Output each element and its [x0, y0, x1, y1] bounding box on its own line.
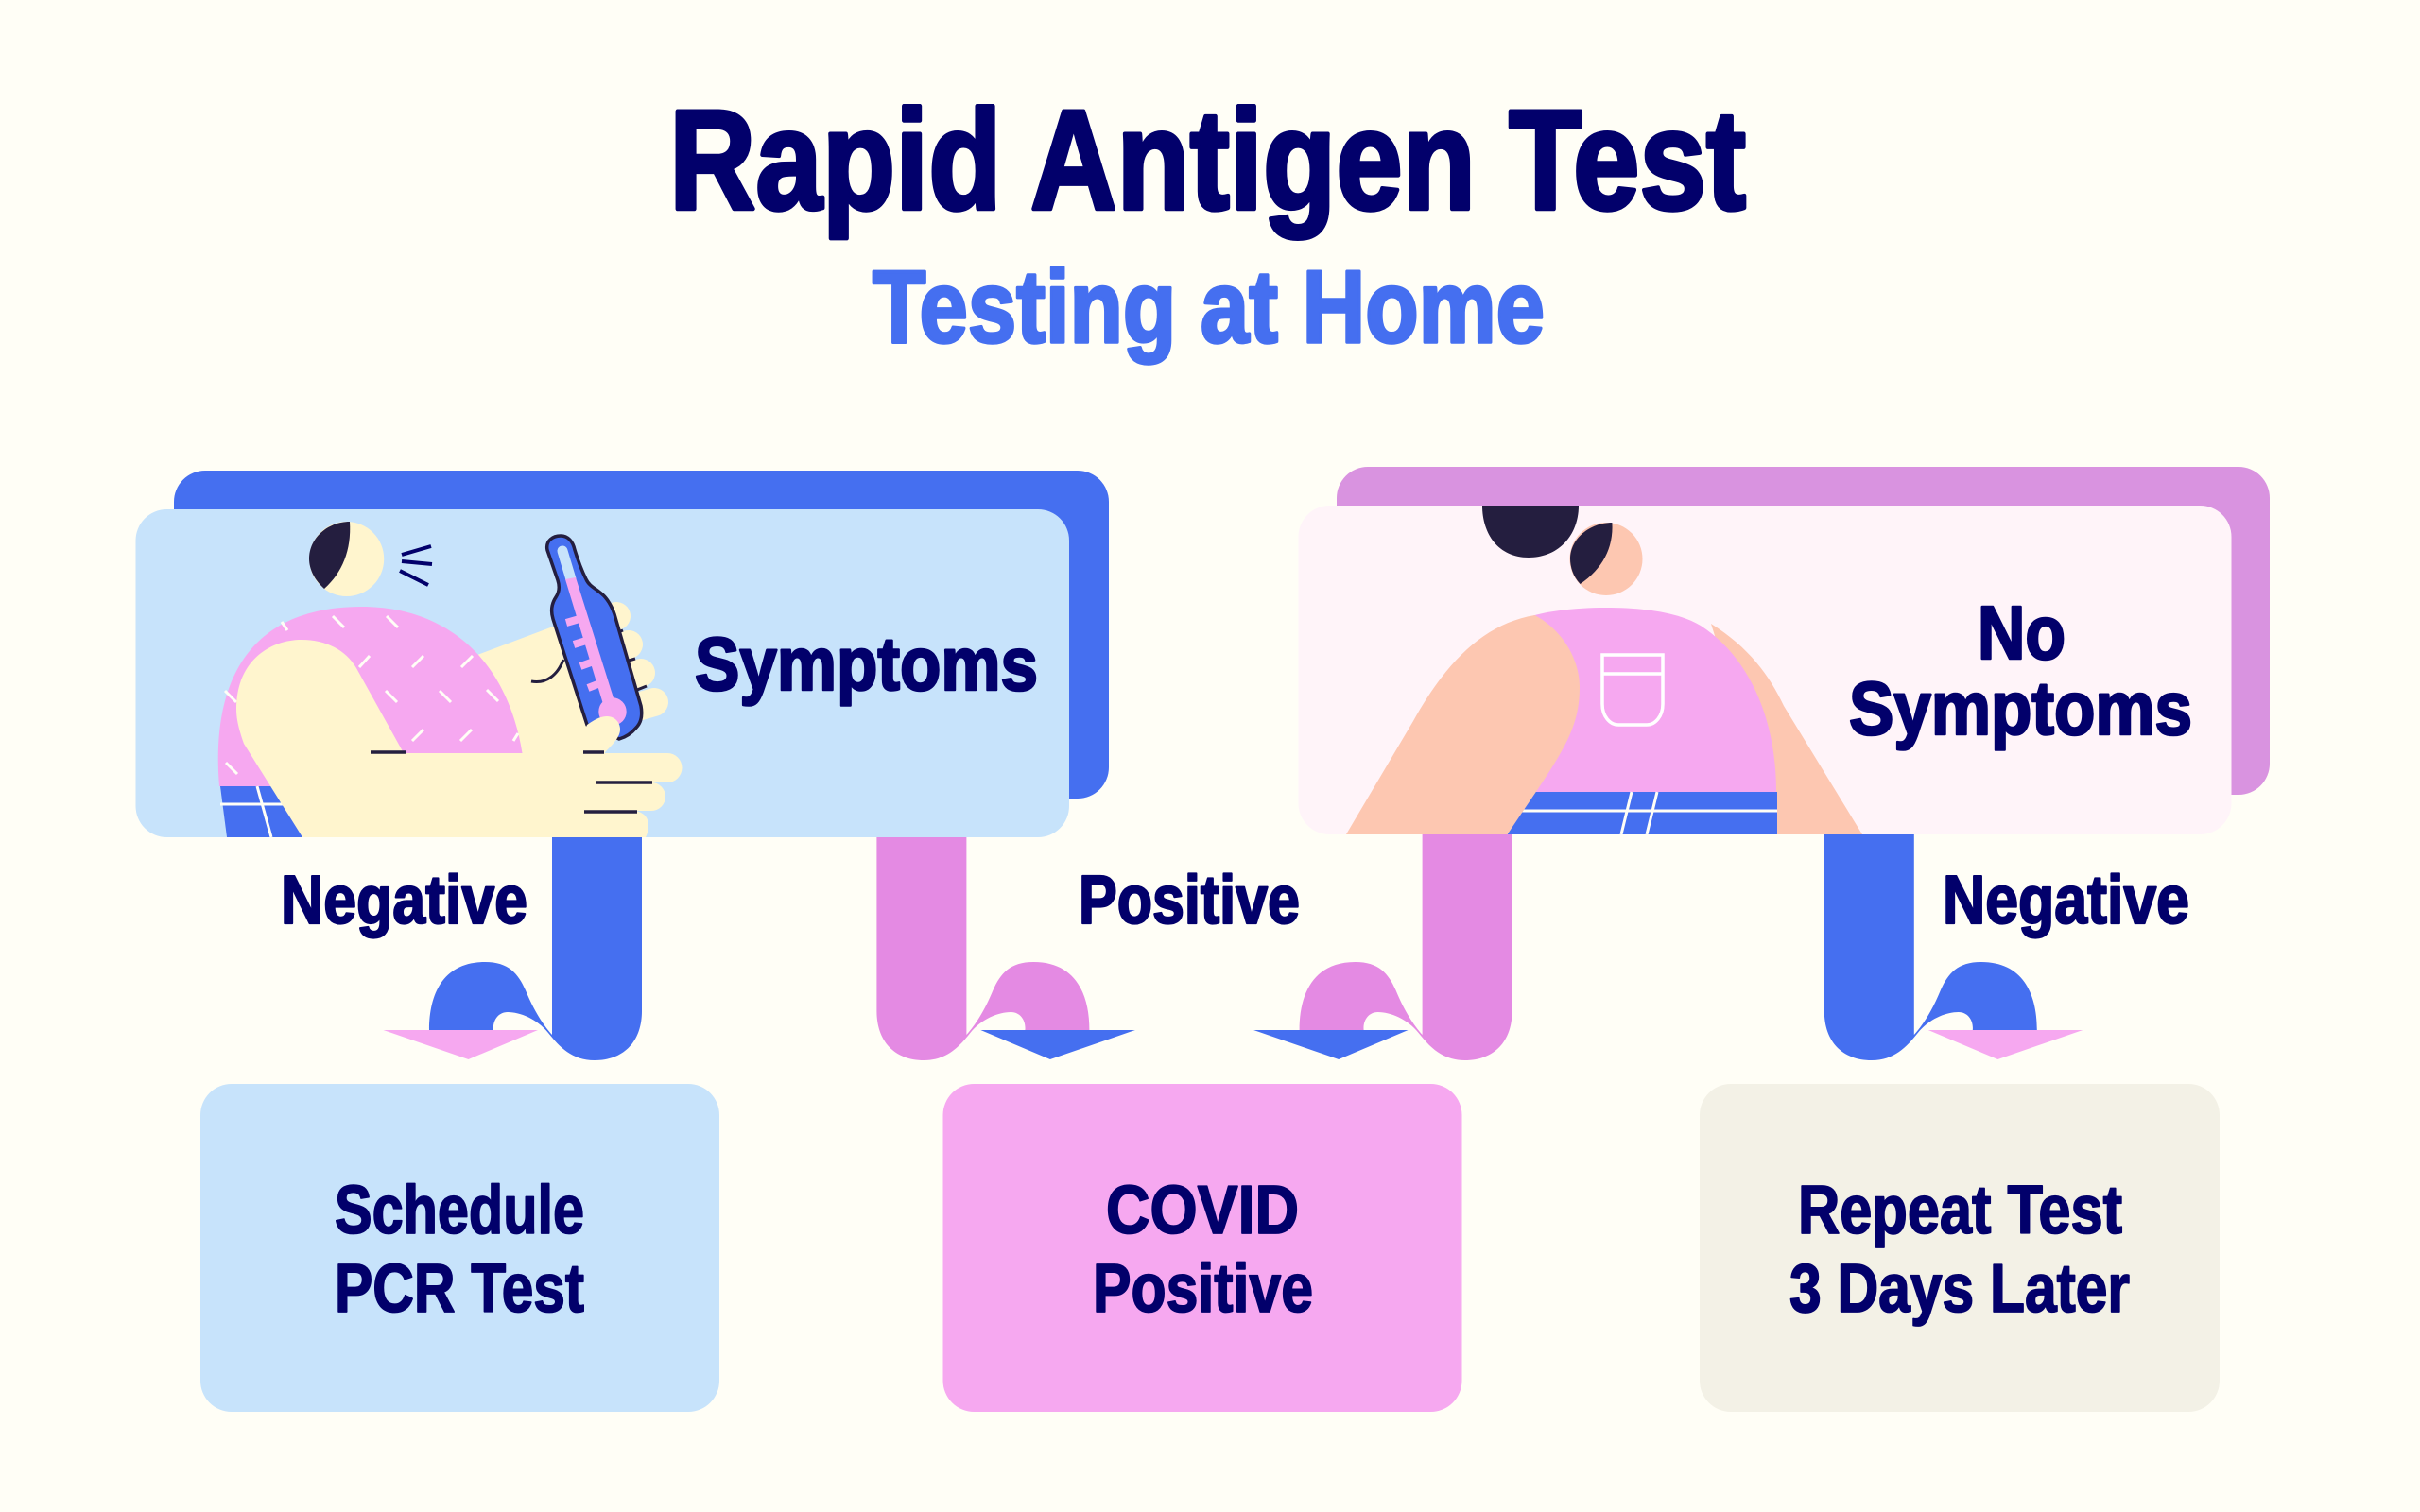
label: symptoms: Symptoms: [1849, 666, 2192, 750]
result box: repeat test: Repeat Test: [1798, 1173, 2122, 1248]
shorts: [1508, 792, 1777, 834]
hand behind thermometer: [477, 616, 654, 756]
label: negative right: Negative: [1943, 863, 2189, 938]
shirt ticks: [225, 616, 518, 774]
result box: repeat test: [1700, 1084, 2220, 1412]
shorts: [220, 786, 307, 837]
head: [309, 522, 384, 596]
connector: symptoms negative arrow: [384, 836, 642, 1060]
result box: covid positive: COVID: [1106, 1173, 1299, 1248]
label: symptoms: Symptoms: [695, 622, 1038, 706]
connector: symptoms positive arrow: [876, 836, 1135, 1060]
illustration: person with thermometer: [218, 522, 683, 837]
connector: no symptoms positive arrow: [1253, 833, 1512, 1060]
title: Rapid Antigen Test: [669, 80, 1746, 239]
label: no: No: [1978, 591, 2066, 675]
head: [1569, 523, 1643, 595]
thermometer: [531, 536, 642, 739]
near arm: [1346, 615, 1580, 834]
shirt: [218, 607, 523, 786]
label: positive: Positive: [1079, 863, 1300, 938]
hair bun: [1482, 506, 1579, 558]
label: negative left: Negative: [281, 863, 527, 938]
pocket: [1602, 655, 1663, 725]
result box: repeat test: 3 Days Later: [1789, 1251, 2130, 1327]
far arm: [1711, 624, 1862, 834]
result box: covid positive: Positive: [1093, 1251, 1313, 1327]
result box: schedule PCR test: PCR Test: [335, 1251, 584, 1327]
panel: no symptoms: [1299, 467, 2270, 834]
result box: schedule PCR test: [200, 1084, 719, 1412]
cough marks: [400, 546, 432, 585]
result box: covid positive: [943, 1084, 1461, 1412]
subtitle: Testing at Home: [873, 249, 1545, 365]
illustration: person from behind: [1346, 506, 1862, 834]
arm and hand: [236, 640, 683, 837]
panel: symptoms: [136, 471, 1109, 837]
shirt: [1531, 608, 1776, 794]
result box: schedule PCR test: Schedule: [335, 1173, 584, 1248]
connector: no symptoms negative arrow: [1824, 833, 2083, 1060]
